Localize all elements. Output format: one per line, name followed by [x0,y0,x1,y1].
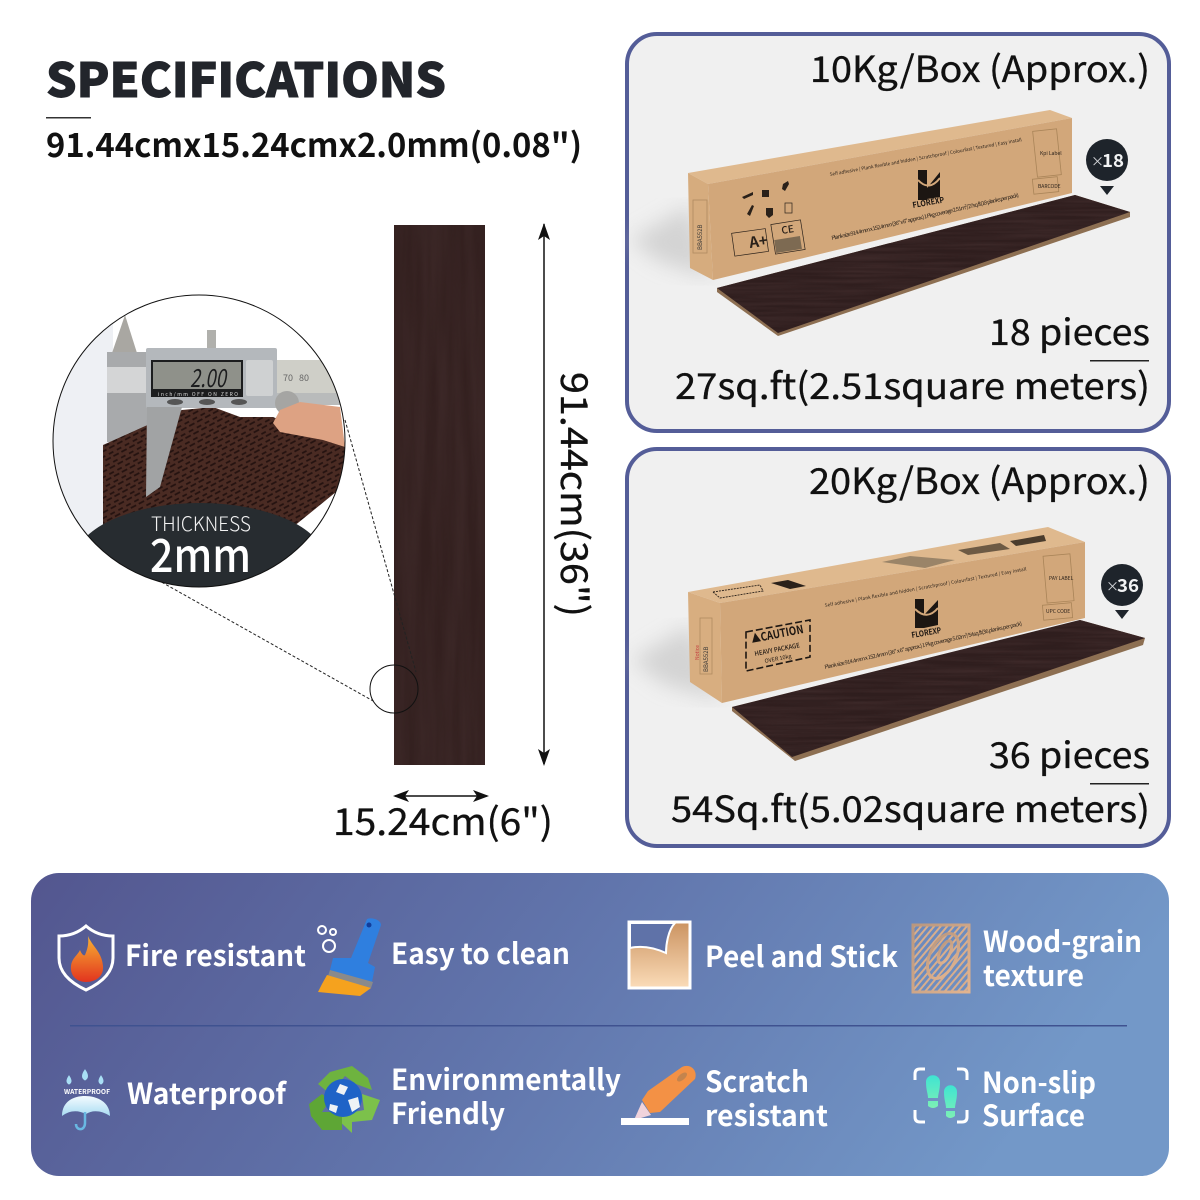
caliper lower jaw [146,407,182,497]
thickness label text: THICKNESS [151,508,251,537]
cardboard box: Kpi Label [1040,150,1062,157]
cardboard box: BBA552B [695,224,704,250]
box print: text rows: Plank size 914.4mm x 152.4mm (36" x 6" approx.) 1 Pkg coverage 5.02m²/54sq.ft(36 planks per pack) [824,619,1023,671]
zoom marker circle and dashed leader lines [140,420,418,713]
title: SPECIFICATIONS [46,42,446,111]
feature: fire resistant [59,926,306,990]
quantity badge x18: × [1091,151,1104,170]
icon: umbrella [62,1070,110,1129]
icon: peeling square [629,922,690,988]
caliper body [146,348,277,408]
icon: footprints in frame [915,1069,967,1122]
plank sample [725,615,1150,765]
feature: wood-grain texture: texture [983,953,1084,995]
thickness detail: caliper measuring circle: inch/mm OFF ON ZERO [158,391,238,398]
feature: non-slip surface [915,1060,1096,1135]
icon: shield with flame [59,926,113,990]
length label: 91.44cm(36") [550,372,604,617]
box print: text rows [824,565,1028,671]
box print: top face marks [713,535,1046,598]
box print: icons and labels [732,181,805,256]
feature: peel and stick [629,922,898,988]
quantity badge x36: × [1106,576,1119,595]
icon: recycling globe [309,1066,380,1133]
box print: text rows: Plank size 914.4mm x 152.4mm (36" x 6" approx.) 1 Pkg coverage 2.51m²/27sq.ft(18 planks per pack) [831,191,1020,242]
piece count: 18 pieces [989,304,1150,356]
box print: logo: FLOREXP [911,625,942,641]
coverage: 54Sq.ft(5.02square meters) [671,781,1150,833]
feature: scratch resistant [621,1059,828,1135]
box print: text rows [829,136,1023,242]
icon: utility knife [621,1066,696,1125]
coverage: 27sq.ft(2.51square meters) [675,358,1150,410]
feature: fire resistant: Fire resistant [125,933,306,975]
thickness detail: caliper measuring circle: 70 80 [283,371,309,384]
weight heading: 10Kg/Box (Approx.) [810,41,1150,93]
arrow: plank width [393,790,489,802]
feature: waterproof: Waterproof [127,1071,287,1113]
thumb screw [207,330,216,348]
feature: scratch resistant: resistant [705,1093,828,1135]
box shadow [632,625,722,700]
arrow: plank length [538,223,550,766]
panel: 20Kg box [627,449,1169,846]
feature: wood-grain texture: Wood-grain [983,919,1142,961]
cardboard box: Notice [694,645,701,660]
caution label [746,620,810,671]
box print: text rows: Self adhesive | Plank flexible and hidden | Scratchproof | Colourfast | Textured | Easy install [829,136,1023,178]
plank sample [710,190,1135,340]
wood sample [103,407,347,535]
icon: brush and bubbles [318,918,381,996]
feature: environmentally friendly [309,1057,621,1133]
thickness detail: caliper measuring circle: 2.00 [190,359,228,395]
quantity badge x36: 36 [1117,572,1139,598]
feature: non-slip surface: Surface [982,1093,1085,1135]
panel: 10Kg box [627,34,1169,431]
feature: environmentally friendly: Environmentally [391,1057,621,1099]
feature: easy to clean [318,918,570,996]
caliper upper jaw [112,315,137,353]
feature: scratch resistant: Scratch [705,1059,809,1101]
thickness detail: caliper measuring circle [52,294,346,588]
feature: peel and stick: Peel and Stick [705,934,898,976]
dark thickness label [88,503,311,586]
box print: icons and labels: A+ [747,230,769,253]
weight heading: 20Kg/Box (Approx.) [809,453,1150,505]
plank front view [394,225,485,765]
quantity badge x18 [1086,139,1128,195]
piece count: 36 pieces [989,727,1150,779]
cardboard box [688,110,1072,280]
box shadow [630,205,712,278]
box print: icons and labels: CE [780,220,795,237]
feature: environmentally friendly: Friendly [391,1091,505,1133]
roller and thumb [275,391,299,412]
cardboard box: PAY LABEL [1049,575,1074,582]
feature: non-slip surface: Non-slip [982,1060,1096,1102]
cardboard box: BBA552B [701,646,710,672]
icon: umbrella: WATERPROOF [64,1086,110,1096]
thickness label text: 2mm [150,520,251,586]
box print: text rows: Self adhesive | Plank flexible and hidden | Scratchproof | Colourfast | Textured | Easy install [824,565,1028,609]
feature: wood-grain texture [913,919,1142,995]
quantity badge x36 [1101,564,1143,619]
icon: wood grain [913,925,969,992]
feature: waterproof [62,1070,287,1129]
subtitle: plank dimensions: 91.44cmx15.24cmx2.0mm(0.08") [46,119,582,167]
panel: features band [31,873,1169,1176]
box print: logo: FLOREXP [912,195,945,211]
caution label: ▲CAUTION [750,621,805,647]
caution label: HEAVY PACKAGE [753,639,801,658]
cardboard box [688,527,1085,703]
cardboard box: UPC CODE [1046,608,1070,615]
width label: 15.24cm(6") [333,792,553,846]
caution label: OVER 10kg [764,652,793,665]
ruler [277,360,336,393]
quantity badge x18: 18 [1102,147,1124,173]
box print: logo [911,599,942,641]
box print: logo [912,170,945,211]
feature: easy to clean: Easy to clean [391,931,570,973]
cardboard box: BARCODE [1038,183,1061,190]
